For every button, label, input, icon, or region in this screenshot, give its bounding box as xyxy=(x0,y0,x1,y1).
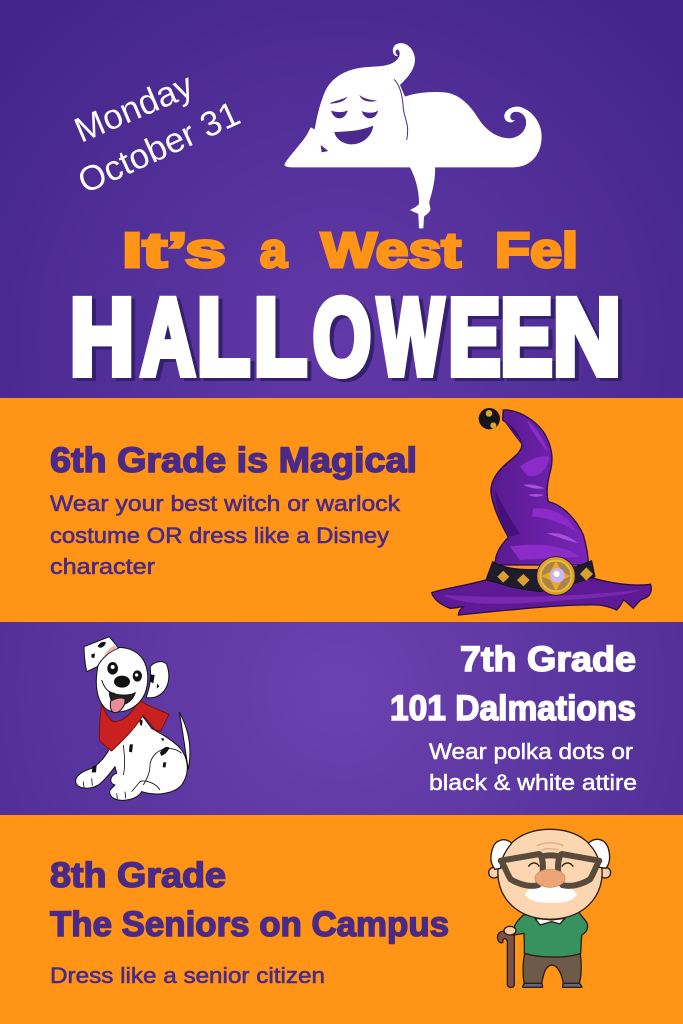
panel: 6th grade background xyxy=(0,398,683,622)
tagline: It’s xyxy=(122,224,226,278)
panel: header background xyxy=(0,0,683,398)
title: L xyxy=(201,279,254,400)
7th grade description xyxy=(429,739,637,795)
6th grade heading: 6th Grade is Magical xyxy=(50,441,417,480)
title: A xyxy=(141,276,195,397)
icon: ghost xyxy=(284,43,542,228)
title: E xyxy=(452,279,504,400)
tagline: a xyxy=(260,224,288,278)
panel: 7th grade background xyxy=(0,622,683,815)
8th grade heading: 8th Grade xyxy=(50,856,226,895)
8th grade heading xyxy=(50,856,449,944)
date text: October 31 xyxy=(72,94,246,201)
title: H xyxy=(74,280,138,400)
8th grade description: Dress like a senior citizen xyxy=(50,963,325,988)
title: E xyxy=(448,276,500,397)
title: A xyxy=(145,279,199,400)
tagline: Fel xyxy=(495,224,578,278)
7th grade description: black & white attire xyxy=(429,770,637,795)
8th grade heading: The Seniors on Campus xyxy=(50,905,449,944)
title: N xyxy=(553,277,621,397)
6th grade description: Wear your best witch or warlock xyxy=(50,491,401,516)
6th grade description xyxy=(50,491,401,579)
icon: witch hat xyxy=(432,408,651,615)
icon: senior man xyxy=(489,829,611,987)
title: N xyxy=(557,280,625,400)
title: O xyxy=(313,276,371,397)
date text: Monday xyxy=(69,66,199,150)
6th grade description: character xyxy=(50,554,156,579)
icon: dalmatian puppy xyxy=(76,637,190,800)
tagline: West xyxy=(321,224,461,278)
title: L xyxy=(258,279,311,400)
title: E xyxy=(504,279,556,400)
title: O xyxy=(317,279,375,400)
title: L xyxy=(197,276,250,397)
title: W xyxy=(382,281,448,401)
title: W xyxy=(378,278,444,398)
7th grade heading: 101 Dalmations xyxy=(390,689,636,728)
7th grade heading xyxy=(390,640,636,728)
7th grade description: Wear polka dots or xyxy=(429,739,634,764)
panel: 8th grade background xyxy=(0,815,683,1024)
title: L xyxy=(254,276,307,397)
6th grade description: costume OR dress like a Disney xyxy=(50,523,390,548)
7th grade heading: 7th Grade xyxy=(460,640,636,679)
title: H xyxy=(70,277,134,397)
tagline xyxy=(122,224,578,278)
title xyxy=(70,276,625,401)
title: E xyxy=(500,276,552,397)
